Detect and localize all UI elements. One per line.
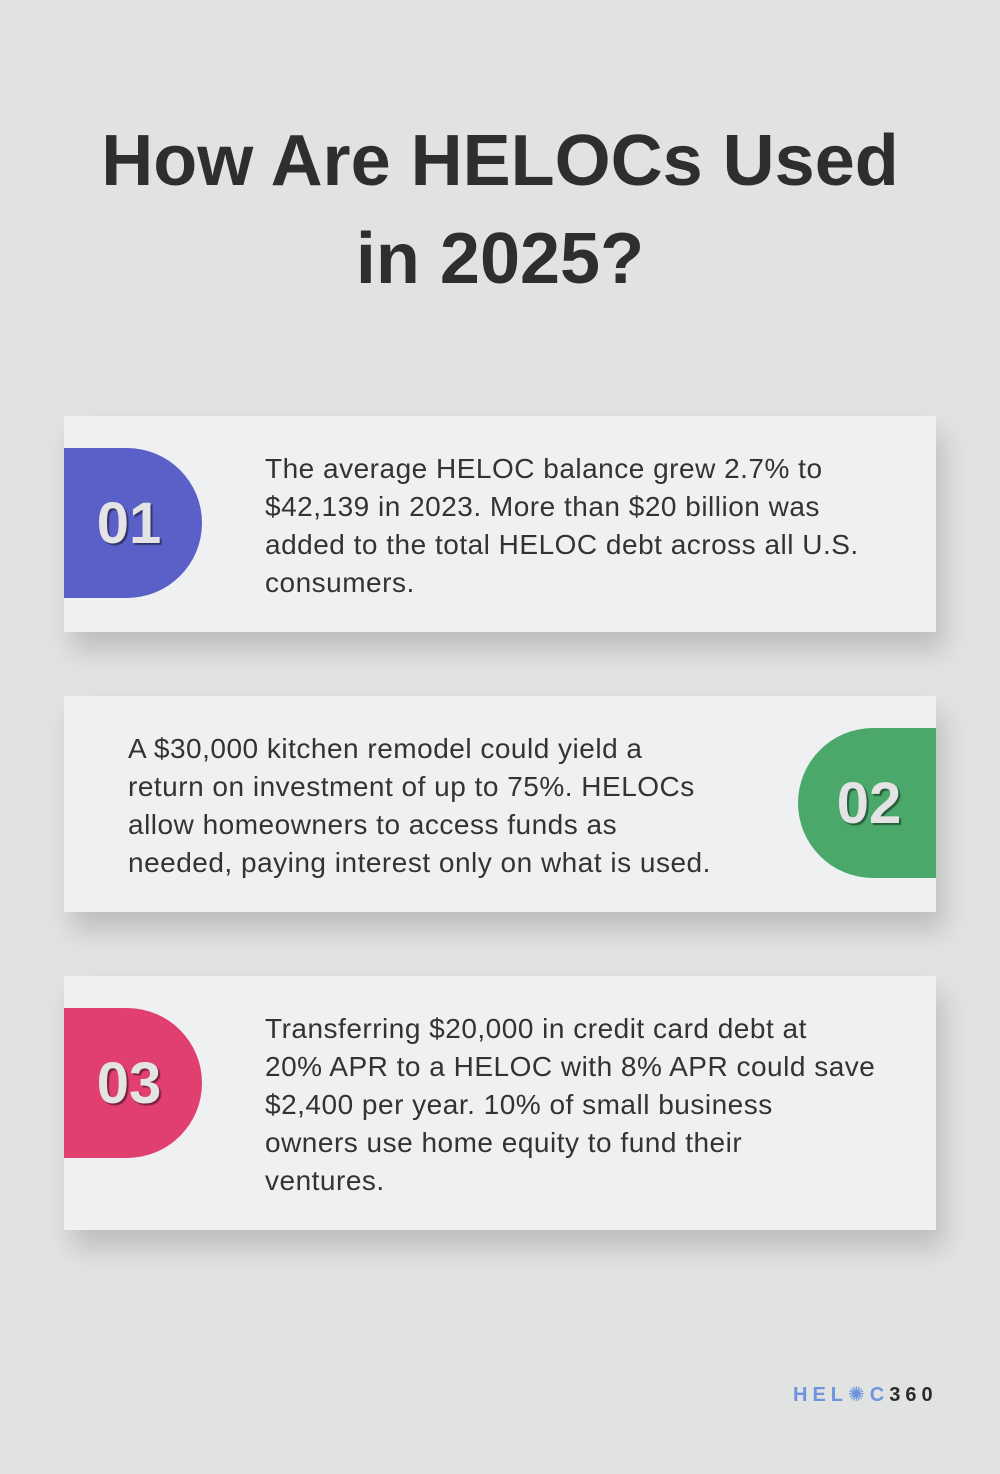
badge 01 (64, 448, 202, 598)
badge 03: 03 (97, 1050, 161, 1116)
text 2: allow homeowners to access funds as (128, 809, 617, 840)
text 2: return on investment of up to 75%. HELOCs (128, 771, 695, 802)
text 2: A $30,000 kitchen remodel could yield a (128, 733, 642, 764)
text 3: 20% APR to a HELOC with 8% APR could save (265, 1051, 875, 1082)
badge 01: 01 (97, 490, 161, 556)
panel: card 1 (64, 416, 936, 632)
text 2 (128, 733, 711, 878)
title: in 2025? (356, 219, 644, 299)
panel: card 3 (64, 976, 936, 1230)
title (101, 121, 899, 299)
text 3: Transferring $20,000 in credit card debt at (265, 1013, 807, 1044)
title: How Are HELOCs Used (101, 121, 899, 201)
text 1: consumers. (265, 567, 415, 598)
text 2: needed, paying interest only on what is used. (128, 847, 711, 878)
badge 02 (798, 728, 936, 878)
text 3: owners use home equity to fund their (265, 1127, 742, 1158)
text 3: $2,400 per year. 10% of small business (265, 1089, 773, 1120)
text 3: ventures. (265, 1165, 385, 1196)
panel: card 2 (64, 696, 936, 912)
text 1: added to the total HELOC debt across all U.S. (265, 529, 859, 560)
text 1 (265, 453, 859, 598)
text 1: The average HELOC balance grew 2.7% to (265, 453, 823, 484)
badge 02: 02 (837, 770, 901, 836)
text 1: $42,139 in 2023. More than $20 billion was (265, 491, 820, 522)
logo: HEL✺C360 (793, 1384, 938, 1406)
badge 03 (64, 1008, 202, 1158)
text 3 (265, 1013, 875, 1196)
